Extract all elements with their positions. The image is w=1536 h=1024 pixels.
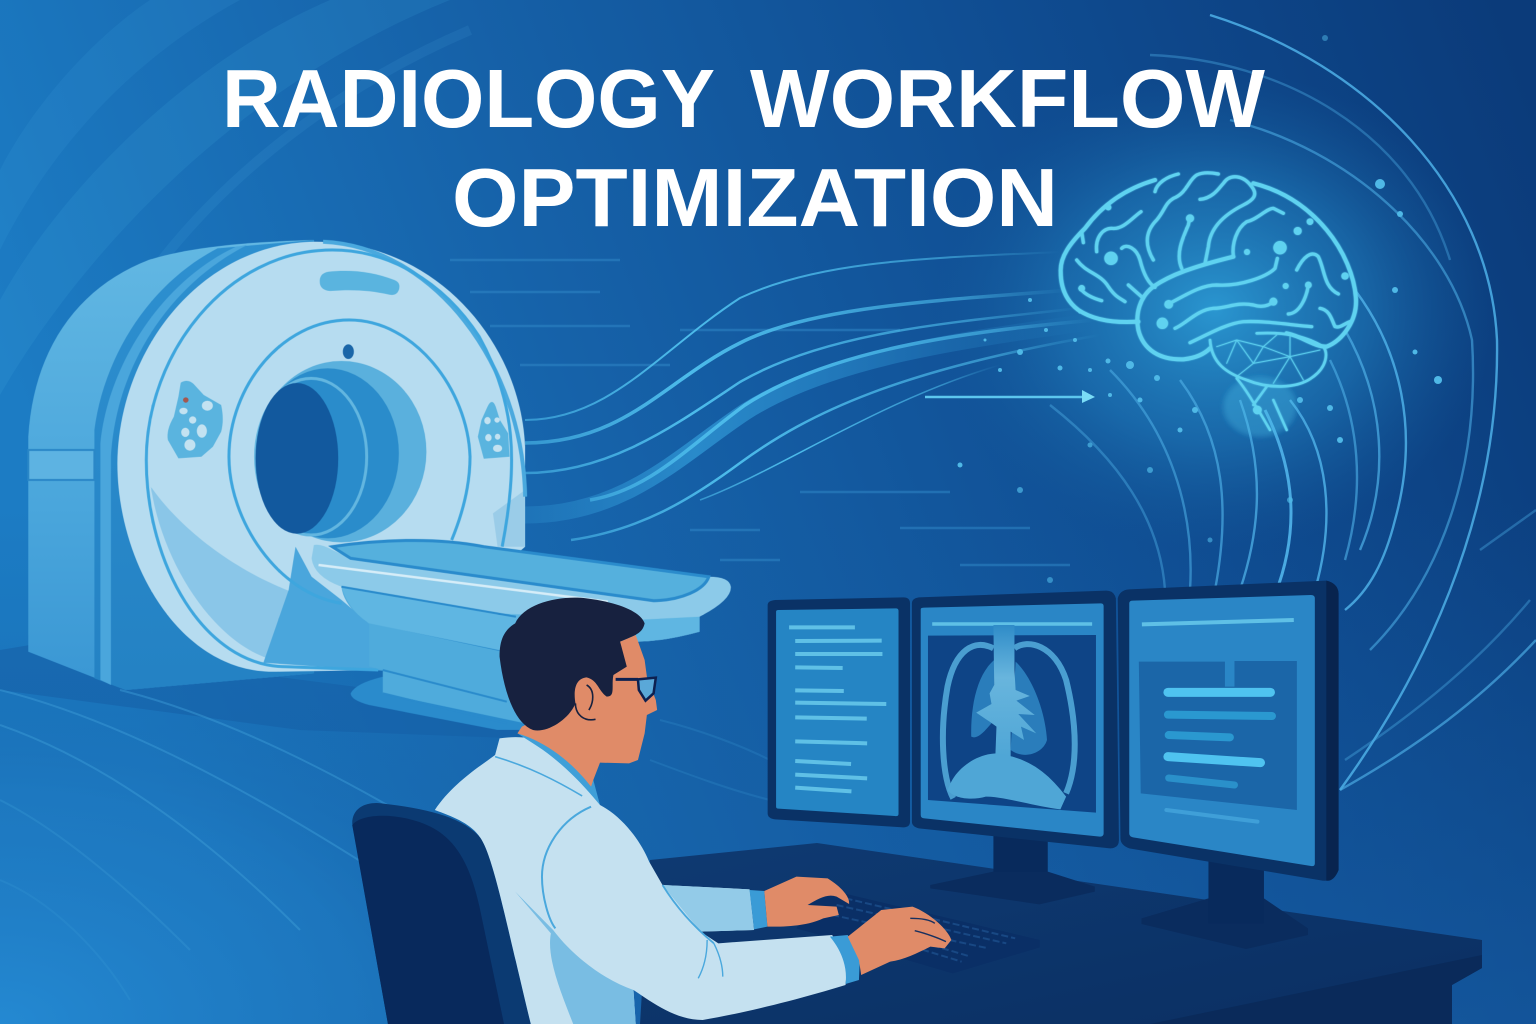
data waves flowing from scanner to brain — [525, 252, 1100, 540]
temporal lobe — [1137, 257, 1233, 359]
radiologist — [352, 598, 951, 1024]
hair — [500, 598, 645, 731]
floor streaks — [0, 690, 770, 1000]
streak lines background — [450, 260, 1070, 565]
keyboard — [796, 892, 1040, 973]
handle bar — [320, 271, 399, 295]
cerebellum — [1210, 333, 1326, 386]
x-ray frame — [928, 635, 1096, 813]
coat seams — [495, 757, 723, 978]
neural arcs around brain — [1050, 15, 1536, 790]
cuffs — [750, 890, 860, 984]
desk — [640, 843, 1482, 1024]
back hand — [764, 877, 849, 927]
chair back — [352, 803, 531, 1024]
middle monitor — [912, 591, 1119, 848]
particles — [958, 35, 1442, 583]
front hand — [848, 907, 951, 975]
coat shadow — [515, 892, 636, 1024]
desk front — [1150, 955, 1482, 1024]
title line 2: OPTIMIZATION — [452, 151, 1058, 244]
gantry edge — [323, 242, 525, 497]
bore ring — [256, 378, 367, 535]
bore opening — [256, 383, 338, 534]
chest x-ray — [943, 625, 1075, 809]
ear — [575, 685, 596, 720]
white coat — [435, 737, 848, 1024]
cerebrum right outline — [1253, 183, 1356, 347]
collar — [517, 733, 600, 805]
report panel — [1139, 661, 1297, 810]
desk top — [640, 843, 1482, 1024]
head and neck skin — [517, 635, 657, 787]
cerebrum outline — [1061, 180, 1155, 322]
gantry front — [117, 242, 525, 672]
left screen — [776, 608, 899, 816]
left report lines — [789, 627, 886, 791]
title line 1 — [222, 52, 1266, 145]
title line 1: RADIOLOGY — [222, 52, 715, 145]
gantry lower shade — [151, 487, 291, 658]
bore outer — [256, 361, 426, 542]
icon: brain — [1061, 173, 1356, 437]
sulci folds — [1077, 173, 1350, 343]
table base foot — [351, 677, 534, 730]
table rim — [312, 545, 731, 642]
housing side — [94, 240, 314, 690]
side panel band — [28, 450, 94, 480]
middle screen — [921, 603, 1104, 837]
header bar — [932, 622, 1092, 626]
right monitor — [1118, 581, 1339, 881]
table pedestal — [341, 587, 617, 723]
inner ring line — [229, 320, 470, 603]
middle stand — [930, 833, 1095, 904]
title — [222, 52, 1266, 244]
back sleeve shade — [663, 885, 754, 932]
outer ring line — [146, 250, 512, 670]
right scan blob — [478, 402, 510, 459]
right screen — [1129, 595, 1315, 866]
table side — [341, 587, 700, 652]
monitors — [768, 581, 1339, 949]
glasses — [616, 678, 656, 701]
left scan blob — [168, 381, 223, 458]
arrow toward brain — [925, 390, 1095, 403]
bore inner — [256, 368, 399, 538]
title line 1: WORKFLOW — [750, 52, 1266, 145]
right stand — [1142, 860, 1308, 949]
brain nodes — [1078, 204, 1349, 414]
sensor dot — [343, 344, 354, 359]
brain stem — [1237, 378, 1287, 430]
pedestal support under gantry — [263, 547, 383, 671]
cerebellum network — [1217, 335, 1320, 383]
header bar — [1142, 620, 1294, 624]
scanner housing — [28, 240, 314, 690]
CT scanner — [28, 240, 731, 730]
report bars — [1166, 692, 1272, 822]
table top bed — [332, 540, 709, 601]
left monitor — [768, 597, 910, 827]
